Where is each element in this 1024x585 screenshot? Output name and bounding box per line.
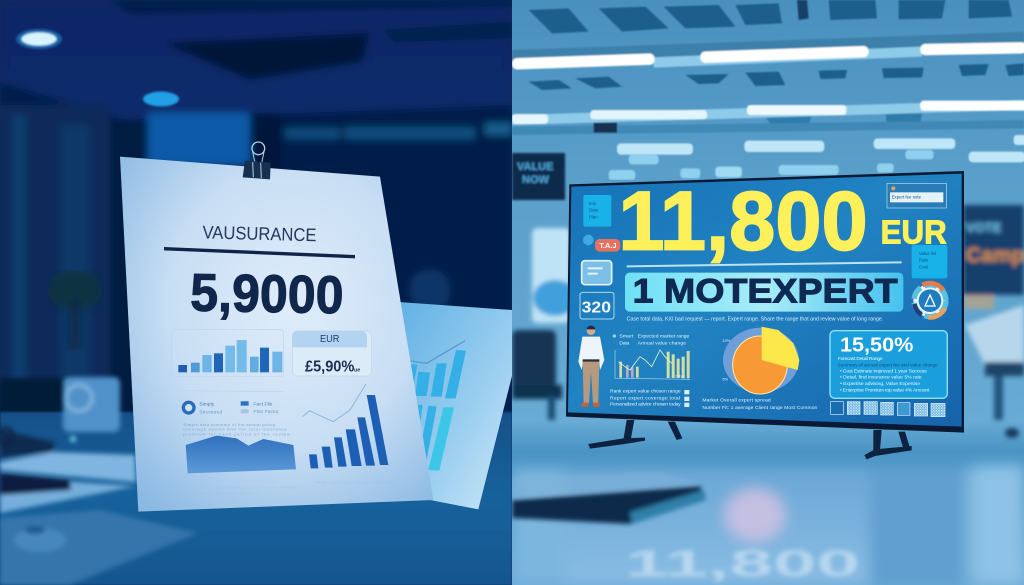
- trend line: [303, 384, 366, 422]
- colored ring icon: [913, 283, 947, 317]
- binder clip: [243, 142, 271, 179]
- percentage card: [830, 331, 947, 398]
- panel: left dark office scene: [0, 0, 512, 585]
- floor reflection: [512, 465, 1024, 585]
- percentage card: • Detail, find insurance value 5% rate: [840, 375, 922, 381]
- chart header text: Data: [619, 341, 630, 347]
- top left info card: Plan: [589, 214, 598, 219]
- document heading: VAUSURANCE: [202, 221, 317, 245]
- monitor stands: [588, 420, 912, 459]
- percentage card: • Expertise advising, Value Expertise: [840, 381, 920, 387]
- headline amount: 5,9000: [190, 264, 344, 325]
- percentage card: Summary of annual expert fee and value change: [838, 363, 938, 368]
- poster and chair right: VOTE: [966, 220, 1002, 235]
- percentage card: Forecast Detail Range: [838, 356, 883, 362]
- bright background: [512, 0, 1024, 585]
- phone on table: [512, 472, 706, 524]
- footnote text: Further policy detail: [190, 491, 257, 495]
- EUR value card: EUR: [320, 334, 339, 345]
- footnote text: Total coverage rising each year: [315, 480, 394, 484]
- tablet in foreground: [0, 510, 198, 585]
- right info card: Value list: [919, 251, 937, 256]
- subtitle text: Case total data, KXI bad request — report. Expert range. Share the range that and review value of long range.: [627, 317, 883, 323]
- badge: T.A.J: [599, 241, 616, 250]
- QR icon row: [831, 402, 945, 417]
- ceiling light right: [143, 92, 179, 106]
- top left info card: [583, 195, 611, 227]
- reflected headline: 11,800: [625, 543, 860, 584]
- top right note: Expert fee note: [892, 195, 922, 200]
- desk clutter: [0, 428, 136, 513]
- back sheet bars: [411, 350, 466, 471]
- EUR value card: ue: [354, 368, 360, 374]
- headline amount: 11,800: [618, 174, 868, 267]
- divider: [627, 261, 902, 267]
- expert banner: 1 MOTEXPERT: [633, 273, 898, 311]
- donut pie chart: 13%: [722, 338, 731, 343]
- checklist text: [610, 388, 689, 408]
- percentage card: • Cost Estimate improved 1 year Success: [840, 369, 927, 375]
- number tile: [580, 292, 614, 319]
- dark chair left: [512, 330, 562, 420]
- screen: [568, 174, 962, 427]
- chart header text: Annual value change: [638, 341, 686, 347]
- checklist text: Report expert coverage total: [610, 395, 680, 401]
- EUR value card: [292, 331, 372, 376]
- top left info card: Date: [589, 208, 599, 213]
- percentage card: • Enterprise Premium top value 4% Amount: [840, 387, 930, 393]
- line and bar chart: [615, 350, 690, 379]
- monitor: [566, 171, 964, 433]
- right info card: Rate: [919, 258, 929, 263]
- coffee cup: [63, 377, 120, 442]
- document icon: [582, 261, 612, 285]
- chart header text: Smart: [619, 334, 634, 340]
- checklist text: Personalized advice chosen today: [610, 402, 681, 408]
- area chart: [186, 436, 296, 473]
- blurred display left of screen: [532, 228, 577, 323]
- heading rule: [164, 247, 355, 258]
- badge: [583, 235, 620, 252]
- background sign: NOW: [522, 174, 550, 186]
- paper sheet: [120, 157, 433, 512]
- divider legend: Fact File: [253, 402, 273, 408]
- main insurance document: [120, 142, 433, 512]
- paragraph text: Simple data summary of the annual policy: [183, 422, 275, 427]
- number tile: 320: [582, 300, 611, 317]
- potted plant: [47, 270, 103, 350]
- background sign: [512, 153, 565, 200]
- chart header text: Expected market range: [638, 334, 690, 340]
- back chart sheet: [393, 302, 512, 509]
- donut pie chart: 5%: [722, 377, 729, 382]
- background sign: VALUE: [517, 161, 553, 173]
- poster and chair right: Camp: [966, 244, 1024, 267]
- divider legend: Plan Factor: [253, 409, 279, 415]
- table surface: [0, 412, 512, 585]
- office background: [0, 0, 512, 412]
- donut pie chart: [722, 327, 799, 394]
- bezel: [566, 171, 964, 433]
- paragraph text: [184, 424, 290, 436]
- divider legend: Structured: [199, 409, 223, 415]
- EUR value card: £5,90%: [305, 359, 354, 376]
- light strips: [512, 47, 1024, 125]
- paragraph text: coverage values and the total insurance: [183, 427, 287, 432]
- ceiling structure: [512, 0, 1024, 180]
- pie caption: Market Overall expert spread: [702, 398, 771, 404]
- ceiling light left: [16, 29, 62, 49]
- pie caption: Number Fit: 1 average Client range Most Common: [702, 405, 818, 411]
- pie caption: [702, 398, 818, 411]
- line and bar chart: Other: [675, 373, 686, 378]
- top left info card: Info: [589, 201, 597, 206]
- paragraph text: premium for each period of the review: [183, 432, 290, 437]
- small bar chart: [172, 329, 283, 377]
- dark desk object: [0, 378, 65, 428]
- panel: right bright office scene: [512, 0, 1024, 585]
- poster and chair right: [963, 205, 1024, 438]
- divider legend: [180, 391, 285, 415]
- footnote text: Notes on the summary of annual values: [190, 485, 297, 489]
- currency label: EUR: [881, 214, 947, 251]
- checklist text: Rank expert value chosen range: [610, 388, 681, 394]
- right info card: Cost: [919, 264, 929, 269]
- rising bar chart: [309, 395, 388, 468]
- footnote text: [190, 480, 394, 495]
- right info card: [912, 245, 947, 278]
- person figure: [578, 326, 604, 407]
- percentage card: 15,50%: [840, 334, 913, 357]
- chart header text: [613, 334, 690, 347]
- divider legend: Simply: [199, 402, 215, 408]
- top right note: [887, 183, 946, 208]
